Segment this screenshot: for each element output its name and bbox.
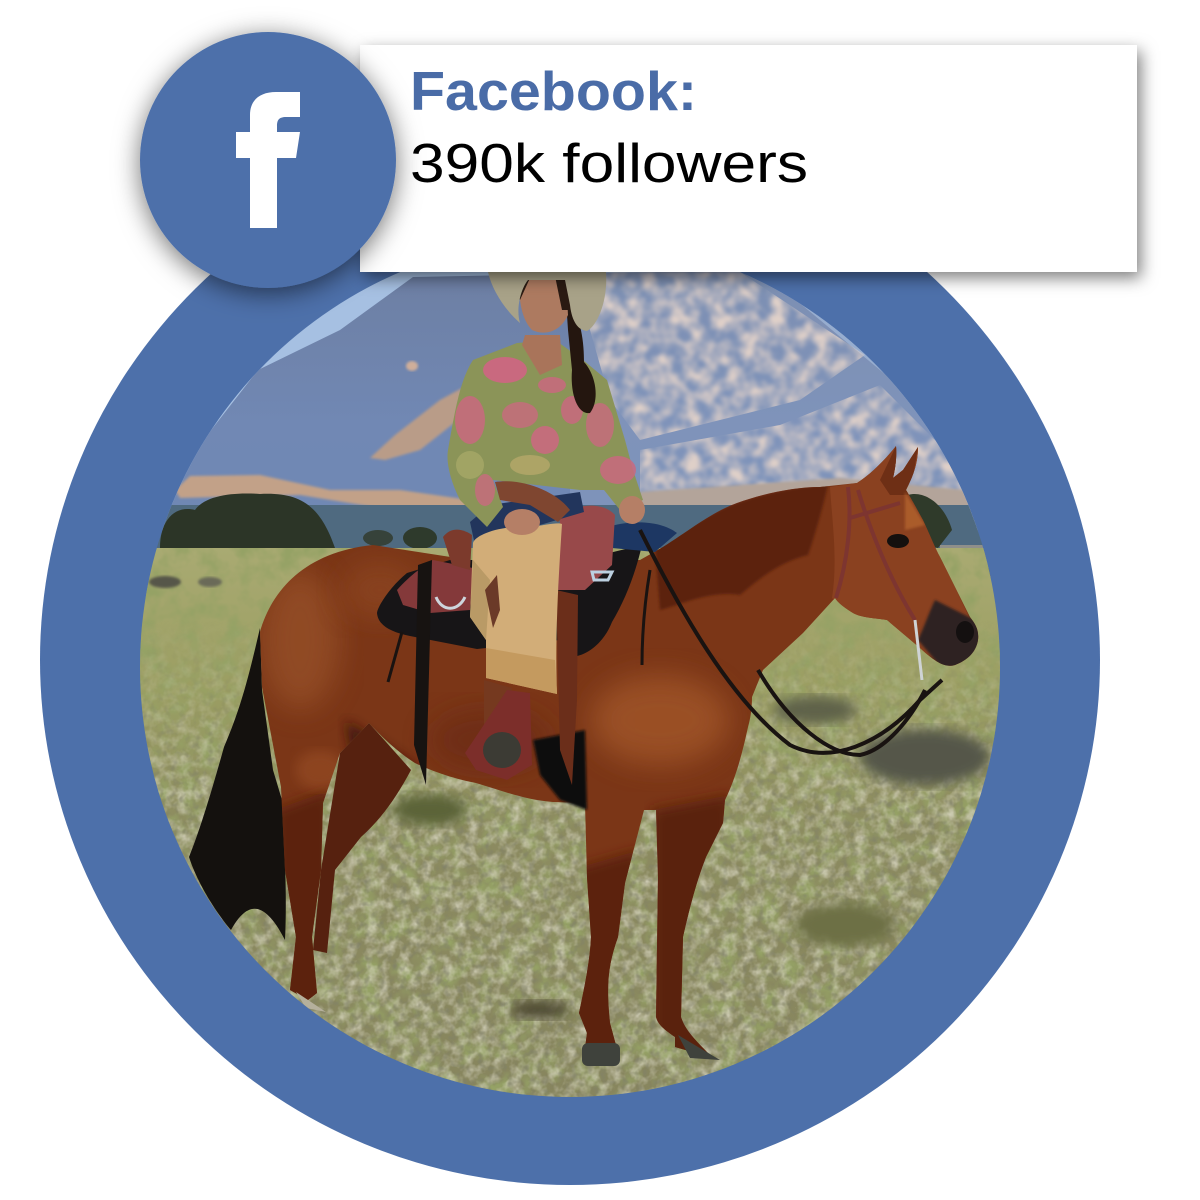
near hind shading xyxy=(282,790,328,1000)
sky xyxy=(162,272,978,530)
blue blanket xyxy=(608,522,677,552)
mane xyxy=(655,485,828,610)
far hind leg xyxy=(313,723,411,953)
saddle pad xyxy=(377,545,642,657)
head and neck xyxy=(520,280,570,375)
saddle xyxy=(397,506,615,785)
horse tail xyxy=(189,628,286,940)
rider jeans xyxy=(470,492,584,545)
hooves xyxy=(296,992,720,1066)
muzzle xyxy=(918,598,978,666)
head xyxy=(830,446,980,670)
icon: Facebook badge xyxy=(140,32,396,288)
far front leg xyxy=(652,795,730,1060)
grass field xyxy=(140,548,1000,1108)
distant tree line xyxy=(140,493,1000,577)
follower count: 390k followers xyxy=(410,132,808,194)
blue ring xyxy=(40,135,1100,1185)
photo: rider on horse xyxy=(140,230,1000,1108)
boot and stirrup xyxy=(465,680,532,780)
belt and hands xyxy=(495,481,645,535)
chaps leg xyxy=(470,523,562,694)
highlights xyxy=(260,570,340,710)
info card xyxy=(360,45,1137,272)
horse eye xyxy=(887,534,909,548)
black under-saddle shadow xyxy=(533,730,587,810)
braid xyxy=(567,310,596,414)
cowboy hat xyxy=(488,272,606,331)
heading: Facebook: Facebook: xyxy=(410,60,697,122)
mountains xyxy=(150,270,1000,532)
reins and bridle xyxy=(388,487,942,755)
horse body xyxy=(250,440,990,1070)
shirt xyxy=(448,340,643,527)
